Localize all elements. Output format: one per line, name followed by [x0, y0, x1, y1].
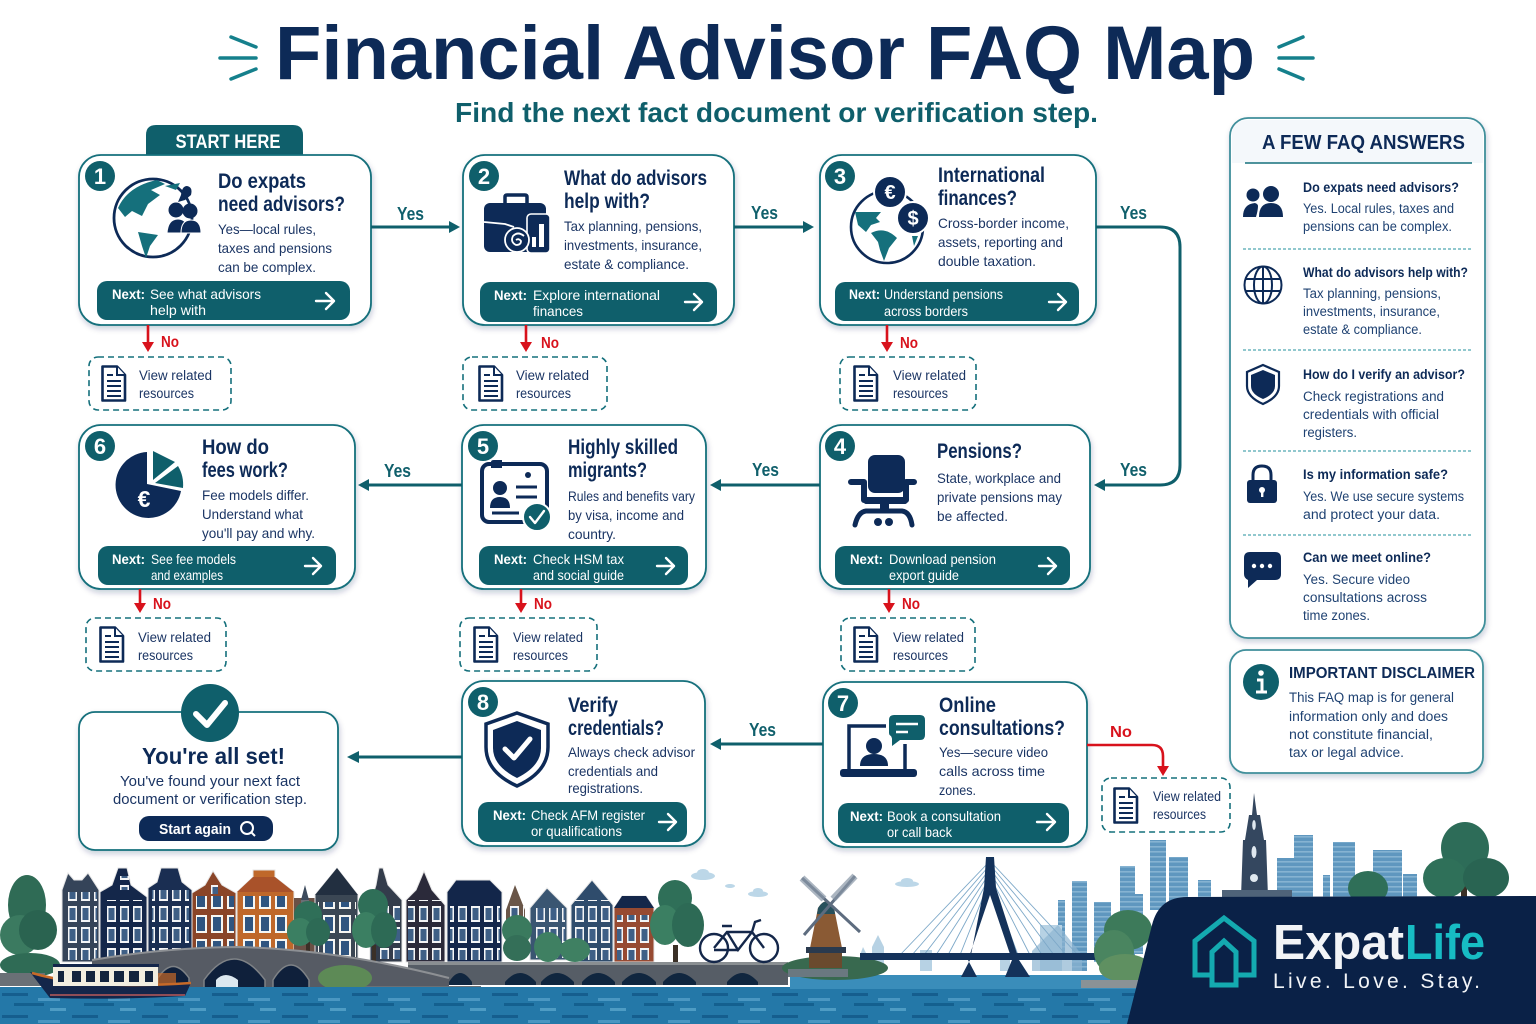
arrow: step 1 no: No: [161, 334, 179, 351]
next button: Next:: [849, 286, 880, 302]
faq 3 text: Check registrations and: [1303, 389, 1444, 404]
icon: laptop video call: [840, 715, 925, 777]
start here tab: [146, 125, 303, 157]
next button: [838, 803, 1069, 843]
body text: Yes—local rules,: [218, 221, 316, 237]
heading: [938, 164, 1045, 210]
logo wordmark: [1273, 916, 1485, 970]
resources box 4: [841, 618, 975, 671]
resources box 7: View related: [1153, 789, 1221, 804]
next button: See fee models: [151, 551, 236, 567]
body text: [937, 470, 1062, 524]
panel: step 2: [463, 155, 734, 325]
heading: How do: [202, 436, 269, 459]
arrow: step 6 no: No: [153, 596, 171, 613]
resources box 3: resources: [893, 386, 948, 401]
faq 3 text: credentials with official: [1303, 407, 1439, 422]
arrow: step 7 no: [1087, 724, 1169, 776]
illustration: canal boat: [30, 964, 191, 999]
faq 2 text: estate & compliance.: [1303, 322, 1422, 337]
next button: Next:: [850, 808, 883, 824]
resources box 1: [89, 357, 231, 410]
next button: finances: [533, 303, 583, 319]
panel: important disclaimer: [1230, 650, 1483, 773]
arrow: step 7 to 8 yes: [710, 720, 823, 750]
next button: [480, 282, 717, 322]
body text: Fee models differ.: [202, 487, 309, 503]
faq 1 text: Yes. Local rules, taxes and: [1303, 201, 1454, 216]
body text: You've found your next fact: [120, 774, 300, 790]
illustration: clouds: [691, 869, 919, 897]
step number 6: [85, 431, 115, 461]
body text: registrations.: [568, 780, 643, 796]
body text: [939, 744, 1048, 798]
faq 3 text: registers.: [1303, 425, 1357, 440]
start again button: [139, 816, 273, 841]
body text: credentials and: [568, 763, 658, 779]
icon: check badge: [181, 684, 239, 742]
panel: step 7: [823, 682, 1087, 847]
faq 2 text: Tax planning, pensions,: [1303, 286, 1441, 301]
panel: step 1: [79, 155, 371, 325]
icon: chat bubble: [1244, 552, 1281, 588]
logo icon: house: [1195, 918, 1254, 985]
next button: See what advisors: [150, 286, 261, 302]
arrow: step 1 to 2 yes: Yes: [397, 204, 424, 224]
heading: help with?: [564, 190, 650, 213]
body text: [564, 218, 702, 272]
disclaimer heading: IMPORTANT DISCLAIMER: [1289, 665, 1475, 682]
body text: Yes—secure video: [939, 744, 1048, 760]
icon: id document with check: [482, 460, 551, 531]
icon: globe with currencies: $: [907, 208, 919, 230]
resources box 2: [463, 357, 607, 410]
logo wordmark: Life: [1405, 916, 1485, 970]
faq 5 text: Can we meet online?: [1303, 550, 1431, 565]
body text: Rules and benefits vary: [568, 488, 695, 504]
next button: export guide: [889, 567, 959, 583]
next button: Check AFM register: [531, 807, 645, 823]
next button: [835, 282, 1079, 321]
panel: step 5: [462, 425, 706, 589]
faq 2 text: [1303, 265, 1468, 337]
arrow: step 4 to 5 yes: [710, 460, 820, 491]
arrow: step 5 no: [515, 589, 552, 613]
faq 4 text: Yes. We use secure systems: [1303, 489, 1464, 504]
icon: office chair: [851, 455, 914, 526]
next button: Check HSM tax: [533, 551, 624, 567]
body text: [218, 221, 332, 275]
step number 1: [85, 161, 115, 191]
step number 4: 4: [834, 434, 847, 459]
start here tab: START HERE: [176, 132, 280, 153]
icon: shield: [1247, 365, 1279, 404]
icon: globe: [1244, 266, 1282, 304]
body text: [938, 215, 1069, 269]
step number 8: [468, 687, 498, 717]
next button: Next:: [112, 286, 145, 302]
arrow: step 2 to 3 yes: Yes: [751, 203, 778, 223]
panel: step 8: [462, 681, 705, 846]
icon: globe with people: [114, 179, 201, 258]
next button: [478, 802, 687, 842]
faq 3 text: How do I verify an advisor?: [1303, 367, 1465, 382]
heading: [568, 436, 678, 482]
next button: help with: [150, 302, 206, 318]
next button: and social guide: [533, 567, 624, 583]
body text: document or verification step.: [113, 792, 307, 808]
arrow: step 2 no: No: [541, 335, 559, 352]
step number 1: 1: [94, 164, 106, 189]
subtitle: Find the next fact document or verification step.: [455, 97, 1098, 128]
next button: [97, 281, 350, 320]
next button: Next:: [494, 287, 527, 303]
next button: or qualifications: [531, 823, 622, 839]
resources box 5: View related: [513, 630, 583, 645]
arrow: step 3 to 4 yes: Yes: [1120, 460, 1147, 480]
next button: Explore international: [533, 287, 660, 303]
heading: finances?: [938, 187, 1017, 210]
arrow: step 5 to 6 yes: [358, 461, 462, 491]
next button: Next:: [493, 807, 526, 823]
icon: briefcase with chart: [484, 195, 550, 253]
resources box 6: [86, 618, 226, 671]
decoration: title left accents: [220, 37, 256, 79]
heading: [564, 167, 707, 213]
illustration: windmill: [782, 876, 888, 980]
faq 1 text: pensions can be complex.: [1303, 219, 1452, 234]
next button: or call back: [887, 824, 953, 840]
arrow: step 7 no: No: [1110, 724, 1132, 741]
resources box 5: resources: [513, 648, 568, 663]
disclaimer text: information only and does: [1289, 709, 1448, 724]
logo wordmark: Expat: [1273, 916, 1404, 970]
next button: and examples: [151, 567, 223, 583]
resources box 6: View related: [138, 630, 211, 645]
panel: step 4: [820, 425, 1090, 589]
icon: padlock: [1247, 466, 1277, 503]
illustration: amsterdam canal houses: [62, 868, 654, 962]
step number 5: 5: [477, 434, 489, 459]
disclaimer text: This FAQ map is for general: [1289, 690, 1454, 705]
resources box 5: [460, 618, 597, 671]
body text: you'll pay and why.: [202, 525, 315, 541]
illustration: erasmus bridge: [860, 857, 1104, 977]
illustration: city skyline: [860, 835, 1417, 971]
body text: Always check advisor: [568, 744, 695, 760]
panel heading: A FEW FAQ ANSWERS: [1262, 132, 1465, 154]
faq 2 text: investments, insurance,: [1303, 304, 1440, 319]
faq 5 text: [1303, 550, 1431, 623]
decoration: title right accents: [1279, 37, 1313, 79]
heading: fees work?: [202, 459, 288, 482]
arrow: step 5 no: No: [534, 596, 552, 613]
step number 3: 3: [834, 164, 846, 189]
step number 3: [825, 161, 855, 191]
panel: step 3: [820, 155, 1096, 325]
resources box 1: resources: [139, 386, 194, 401]
disclaimer text: not constitute financial,: [1289, 727, 1433, 742]
arrow: step 3 no: No: [900, 335, 918, 352]
resources box 4: View related: [893, 630, 964, 645]
heading: [218, 170, 345, 216]
heading: Online: [939, 694, 996, 717]
resources box 6: resources: [138, 648, 193, 663]
body text: [568, 744, 695, 796]
icon: pie chart: €: [138, 486, 151, 512]
heading: credentials?: [568, 717, 664, 740]
panel heading: [1232, 120, 1483, 163]
disclaimer text: tax or legal advice.: [1289, 745, 1404, 760]
step number 2: 2: [478, 164, 490, 189]
body text: be affected.: [937, 508, 1008, 524]
arrow: step 2 to 3 yes: [734, 203, 814, 233]
illustration: church tower: [1222, 793, 1292, 898]
heading: You're all set!: [142, 743, 285, 769]
arrow: step 2 no: [520, 325, 559, 352]
heading: Pensions?: [937, 440, 1022, 463]
icon: info: [1243, 664, 1279, 700]
body text: investments, insurance,: [564, 237, 702, 253]
body text: assets, reporting and: [938, 234, 1063, 250]
next button: Download pension: [889, 551, 996, 567]
step number 5: [468, 431, 498, 461]
next button: Book a consultation: [887, 808, 1001, 824]
next button: [98, 546, 336, 585]
resources box 1: View related: [139, 368, 212, 383]
resources box 3: [840, 357, 976, 410]
body text: [568, 488, 695, 542]
faq 4 text: Is my information safe?: [1303, 467, 1448, 482]
heading: [939, 694, 1065, 740]
resources box 2: resources: [516, 386, 571, 401]
arrow: step 6 no: [134, 589, 171, 613]
arrow: step 3 to 4 yes: Yes: [1120, 203, 1147, 223]
heading: International: [938, 164, 1045, 187]
step number 7: [828, 688, 858, 718]
next button: Next:: [494, 551, 527, 567]
start again button: Start again: [159, 822, 231, 838]
resources box 3: View related: [893, 368, 966, 383]
arrow: step 7 to 8 yes: Yes: [749, 720, 776, 740]
panel: step 6: [79, 425, 355, 589]
next button: Next:: [850, 551, 883, 567]
arrow: step 3 to 4 yes: [1094, 203, 1180, 491]
step number 4: [825, 431, 855, 461]
body text: [202, 487, 315, 541]
body text: Cross-border income,: [938, 215, 1069, 231]
body text: zones.: [939, 782, 976, 798]
heading: [202, 436, 288, 482]
icon: globe with currencies: €: [884, 182, 896, 204]
heading: need advisors?: [218, 193, 345, 216]
step number 8: 8: [477, 690, 489, 715]
arrow: step 4 no: [883, 589, 920, 613]
next button: Next:: [112, 551, 145, 567]
body text: can be complex.: [218, 259, 316, 275]
next button: across borders: [884, 303, 968, 319]
resources box 2: View related: [516, 368, 589, 383]
icon: globe with currencies: [851, 176, 929, 263]
faq 1 text: [1303, 180, 1459, 234]
icon: people: [1243, 186, 1283, 217]
illustration: stone canal bridges: [0, 947, 788, 992]
arrow: step 8 to finish: [347, 751, 462, 763]
arrow: step 5 to 6 yes: Yes: [384, 461, 411, 481]
next button: [835, 546, 1070, 585]
body text: estate & compliance.: [564, 256, 689, 272]
disclaimer text: [1289, 690, 1454, 760]
illustration: water: [0, 975, 1180, 1024]
heading: Highly skilled: [568, 436, 678, 459]
illustration: trees: [0, 875, 704, 980]
arrow: step 4 no: No: [902, 596, 920, 613]
heading: migrants?: [568, 459, 647, 482]
step number 6: 6: [94, 434, 106, 459]
illustration: bicycle: [700, 920, 778, 962]
next button: Understand pensions: [884, 286, 1003, 302]
icon: shield check: [486, 713, 548, 786]
faq 5 text: Yes. Secure video: [1303, 572, 1410, 587]
faq 2 text: What do advisors help with?: [1303, 265, 1468, 280]
faq 3 text: [1303, 367, 1465, 440]
body text: double taxation.: [938, 253, 1036, 269]
body text: calls across time: [939, 763, 1045, 779]
heading: [568, 694, 664, 740]
heading: Do expats: [218, 170, 306, 193]
next button: [479, 546, 688, 585]
resources box 4: resources: [893, 648, 948, 663]
resources box 7: [1102, 778, 1230, 832]
arrow: step 1 no: [142, 325, 179, 352]
body text: private pensions may: [937, 489, 1062, 505]
body text: State, workplace and: [937, 470, 1061, 486]
logo tagline: Live. Love. Stay.: [1273, 970, 1480, 993]
faq 4 text: [1303, 467, 1464, 522]
body text: Understand what: [202, 506, 303, 522]
faq 1 text: Do expats need advisors?: [1303, 180, 1459, 195]
panel: a few faq answers: [1230, 118, 1485, 638]
faq 5 text: time zones.: [1303, 608, 1370, 623]
faq 4 text: and protect your data.: [1303, 507, 1440, 522]
illustration: trees right of bridge: [1081, 822, 1509, 988]
arrow: step 4 to 5 yes: Yes: [752, 460, 779, 480]
faq 5 text: consultations across: [1303, 590, 1427, 605]
body text: [113, 774, 307, 808]
heading: What do advisors: [564, 167, 707, 190]
step number 2: [469, 161, 499, 191]
body text: taxes and pensions: [218, 240, 332, 256]
body text: by visa, income and: [568, 507, 684, 523]
body text: Tax planning, pensions,: [564, 218, 702, 234]
panel: all set: [79, 684, 338, 850]
arrow: step 1 to 2 yes: [371, 204, 460, 233]
step number 7: 7: [837, 691, 849, 716]
icon: pie chart: [116, 451, 183, 518]
resources box 7: resources: [1153, 807, 1206, 822]
title: Financial Advisor FAQ Map: [275, 11, 1255, 96]
arrow: step 3 no: [881, 325, 918, 352]
heading: Verify: [568, 694, 618, 717]
heading: consultations?: [939, 717, 1065, 740]
logo panel: [1127, 896, 1536, 1024]
body text: country.: [568, 526, 616, 542]
